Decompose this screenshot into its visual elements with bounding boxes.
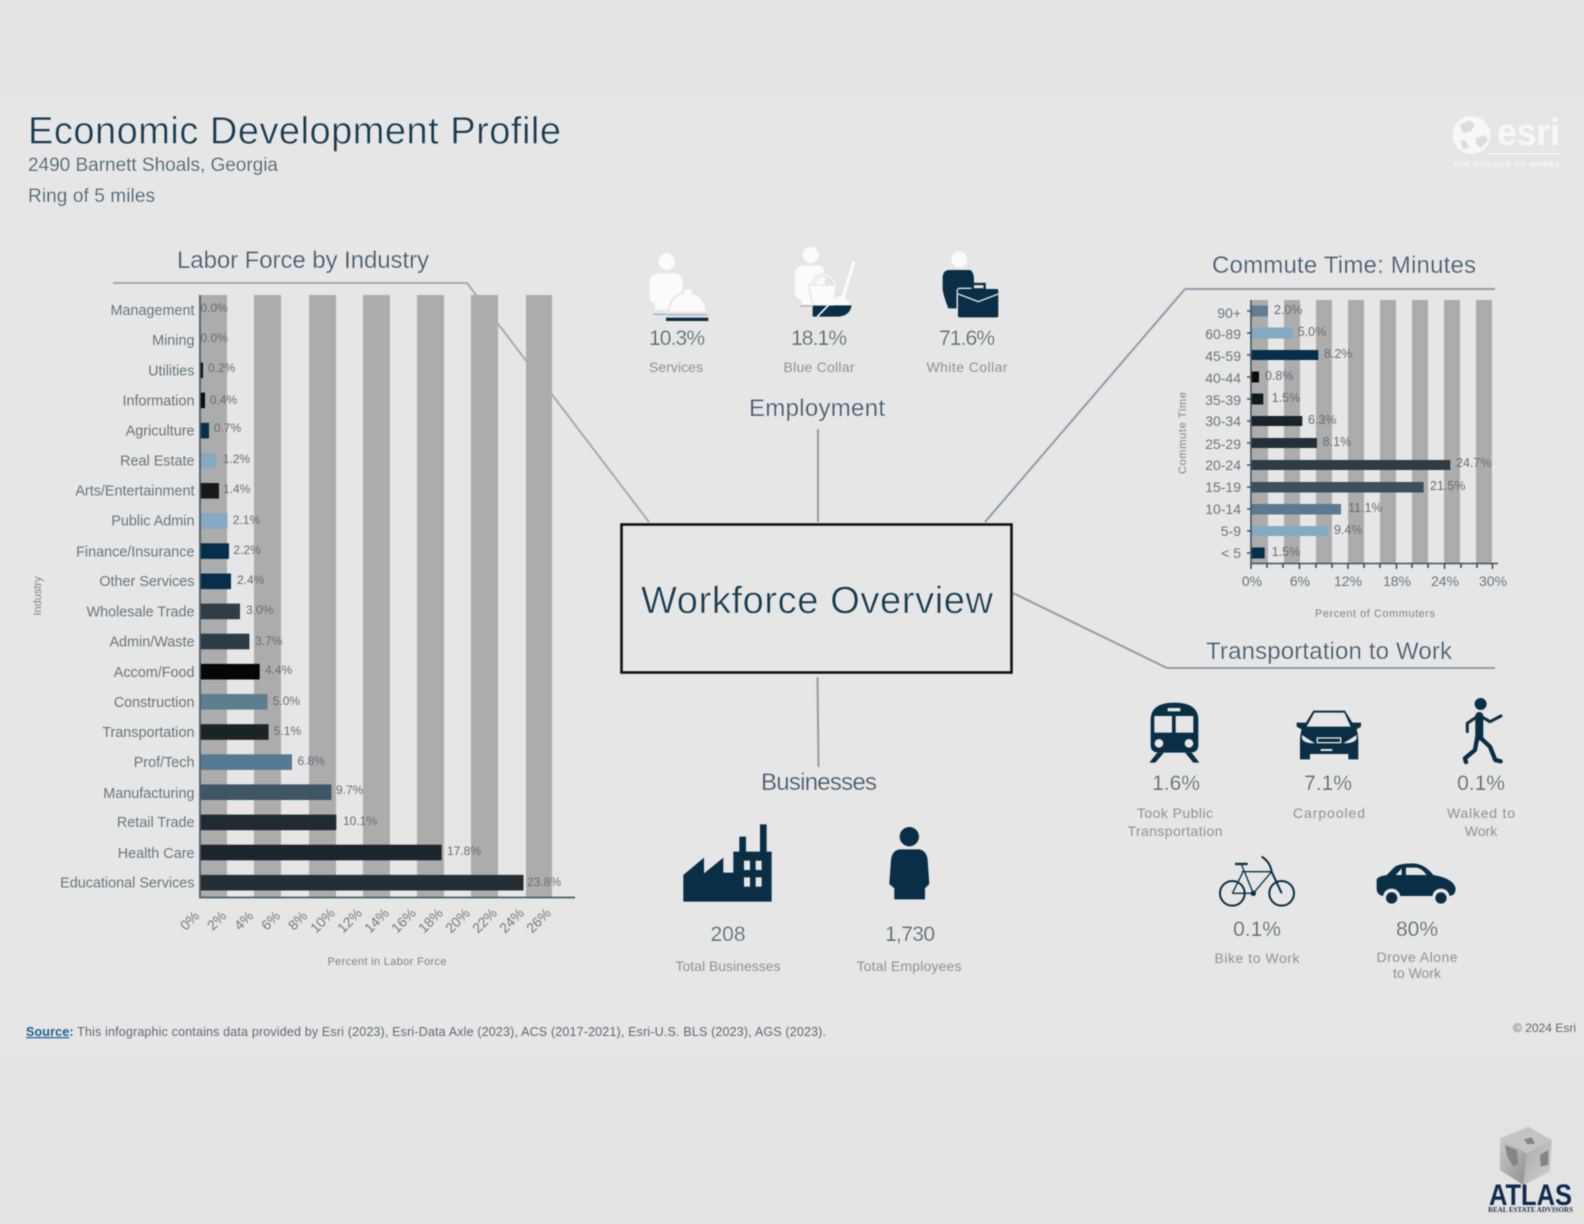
value labels: 10.1% [343, 814, 377, 828]
value labels: 2.2% [233, 543, 261, 557]
value labels: 0.8% [1265, 369, 1294, 383]
value labels [200, 301, 561, 889]
heading: labor force: Labor Force by Industry [177, 247, 429, 274]
category labels: 25-29 [1205, 436, 1241, 452]
x axis ticks: 12% [334, 905, 365, 936]
value labels: 0.4% [210, 393, 237, 407]
x axis ticks: 10% [307, 905, 338, 936]
category labels: Accom/Food [114, 665, 194, 681]
caption: public transportation: Took Public [1137, 805, 1213, 821]
source note: Source: This infographic contains data provided by Esri (2023), Esri-Data Axle (2023), ACS (2017-2021), Esri-U.S. BLS (2023), AGS (2023). [26, 1025, 826, 1039]
value labels: 0.2% [208, 361, 236, 375]
category labels: Management [110, 303, 194, 319]
x axis ticks: 12% [1334, 573, 1362, 589]
caption line two: drove alone: to Work [1393, 965, 1442, 981]
value labels: 1.5% [1272, 391, 1300, 405]
category labels: Admin/Waste [109, 634, 194, 650]
chart background stripes [1252, 300, 1492, 563]
axes [200, 295, 575, 898]
caption: total employees: Total Employees [856, 958, 962, 974]
value labels [1265, 303, 1491, 559]
x axis ticks [177, 905, 554, 936]
category labels: Other Services [99, 574, 194, 590]
icon: esri logo: THE SCIENCE OF WHERE [1453, 160, 1560, 169]
caption: services: Services [649, 359, 703, 375]
value labels: 9.7% [336, 783, 364, 797]
caption line two: walked: Work [1465, 823, 1498, 839]
panel: workforce overview box: Workforce Overview [641, 580, 994, 622]
value labels: 0.0% [200, 331, 228, 345]
x axis ticks: 18% [1383, 573, 1411, 589]
bars: commute [1251, 306, 1450, 558]
x axis ticks: 4% [231, 908, 256, 933]
caption: walked: Walked to [1447, 805, 1515, 821]
value labels: 11.1% [1348, 501, 1383, 515]
category labels: 40-44 [1205, 370, 1241, 386]
connector: labor force line [113, 283, 649, 522]
x axis ticks: 16% [388, 905, 419, 936]
value labels: 2.1% [233, 513, 260, 527]
category labels: Health Care [118, 846, 194, 862]
caption: blue collar: Blue Collar [784, 359, 855, 375]
caption: bike: Bike to Work [1214, 950, 1300, 966]
axes and ticks [1247, 300, 1498, 569]
category labels: Prof/Tech [134, 755, 194, 771]
caption: total businesses: Total Businesses [676, 958, 780, 974]
icon: esri logo [1452, 112, 1560, 169]
panel: transportation to work [1128, 638, 1515, 981]
x axis ticks: 0% [1242, 573, 1262, 589]
value labels: 2.0% [1274, 303, 1302, 317]
x axis ticks: 8% [285, 908, 310, 933]
category labels: Information [122, 394, 194, 410]
category labels: 10-14 [1205, 501, 1241, 517]
x axis ticks: 0% [177, 908, 202, 933]
x axis title: Percent of Commuters [1315, 608, 1436, 620]
x axis ticks: 30% [1479, 573, 1507, 589]
value labels: 17.8% [447, 844, 481, 858]
text: total employees value: 1,730 [885, 923, 935, 946]
heading: transportation: Transportation to Work [1206, 638, 1453, 665]
category labels: 60-89 [1205, 326, 1241, 342]
text: carpooled: 7.1% [1304, 772, 1352, 795]
x axis ticks: 26% [523, 905, 554, 936]
category labels: 5-9 [1221, 523, 1241, 539]
text: white collar: 71.6% [939, 327, 995, 350]
x axis ticks: 24% [496, 905, 527, 936]
category labels: Transportation [102, 725, 194, 741]
icon: train [1149, 703, 1199, 763]
icon: employee person [889, 827, 929, 899]
icon: services [649, 253, 708, 321]
copyright: © 2024 Esri [1513, 1021, 1576, 1035]
category labels: Real Estate [120, 454, 194, 470]
subtitle: address: 2490 Barnett Shoals, Georgia [28, 155, 278, 176]
value labels: 1.2% [223, 452, 250, 466]
category labels: Manufacturing [103, 786, 194, 802]
value labels: 8.2% [1324, 347, 1352, 361]
value labels: 5.1% [274, 724, 301, 738]
x axis ticks: 22% [469, 905, 500, 936]
caption: drove alone: Drove Alone [1376, 949, 1458, 965]
y axis title: Industry [32, 576, 44, 616]
caption line two: public transportation: Transportation [1128, 823, 1222, 839]
value labels: 3.7% [255, 634, 283, 648]
chart background stripes [200, 295, 552, 897]
connector: commute line [985, 289, 1495, 522]
category labels: Arts/Entertainment [75, 484, 194, 500]
icon: bicycle [1220, 857, 1294, 906]
x axis ticks: 14% [361, 905, 392, 936]
x axis title: Percent in Labor Force [328, 956, 446, 968]
text: services: 10.3% [649, 327, 705, 350]
value labels: 5.0% [273, 694, 300, 708]
icon: blue collar [795, 247, 854, 317]
caption: white collar: White Collar [926, 359, 1008, 375]
x axis ticks: 24% [1431, 573, 1459, 589]
icon: atlas logo: ATLAS [1489, 1179, 1572, 1212]
x axis ticks: 6% [258, 908, 283, 933]
value labels: 6.8% [298, 754, 325, 768]
panel: commute time [1177, 252, 1507, 620]
text: blue collar: 18.1% [791, 327, 847, 350]
category labels: Educational Services [60, 876, 194, 892]
category labels: 45-59 [1205, 348, 1241, 364]
bars: industries [200, 362, 524, 890]
value labels: 1.5% [1272, 545, 1300, 559]
icon: car front [1297, 711, 1361, 759]
category labels: 15-19 [1205, 479, 1241, 495]
text: public transportation: 1.6% [1152, 772, 1200, 795]
category labels: Retail Trade [117, 815, 194, 831]
icon: atlas logo: REAL ESTATE ADVISORS [1488, 1206, 1573, 1214]
text: walked: 0.1% [1457, 772, 1505, 795]
value labels: 0.0% [200, 301, 228, 315]
value labels: 9.4% [1334, 523, 1362, 537]
chart: labor force by industry [32, 247, 575, 968]
panel: workforce overview box [622, 524, 1012, 672]
heading: employment: Employment [749, 395, 885, 422]
icon: white collar [943, 251, 999, 318]
category labels: Mining [152, 333, 194, 349]
value labels: 21.5% [1430, 479, 1465, 493]
category labels: 20-24 [1205, 457, 1241, 473]
icon: walker [1465, 698, 1501, 762]
value labels: 6.3% [1308, 413, 1336, 427]
panel: employment [649, 247, 1008, 422]
value labels: 24.7% [1456, 456, 1491, 470]
text: total businesses value: 208 [710, 923, 746, 946]
title: Economic Development Profile [28, 110, 561, 152]
icon: atlas logo [1488, 1127, 1573, 1214]
x axis ticks: 20% [442, 905, 473, 936]
value labels: 1.4% [223, 482, 251, 496]
category labels: Wholesale Trade [86, 604, 194, 620]
heading: businesses: Businesses [761, 769, 877, 796]
value labels: 0.7% [214, 421, 241, 435]
connector: employment line [817, 429, 819, 522]
icon: esri logo: esri [1497, 112, 1560, 154]
icon: car side [1377, 863, 1456, 906]
value labels: 8.1% [1323, 435, 1351, 449]
value labels: 2.4% [237, 573, 265, 587]
connector: transportation line [1013, 593, 1495, 668]
text: drove alone: 80% [1396, 918, 1438, 941]
category labels: Agriculture [126, 424, 194, 440]
value labels: 3.0% [246, 603, 274, 617]
x axis ticks [1242, 573, 1507, 589]
category labels: Utilities [148, 364, 194, 380]
heading: commute: Commute Time: Minutes [1212, 252, 1476, 279]
value labels: 4.4% [265, 663, 293, 677]
y axis title: Commute Time [1177, 392, 1189, 474]
category labels [1205, 305, 1241, 561]
category labels: < 5 [1221, 545, 1241, 561]
icon: factory [683, 824, 772, 902]
text: bike: 0.1% [1233, 918, 1281, 941]
value labels: 23.8% [527, 875, 561, 889]
connector: businesses line [818, 677, 819, 767]
value labels: 5.0% [1298, 325, 1326, 339]
category labels: Construction [114, 695, 194, 711]
category labels [60, 303, 194, 892]
subtitle: ring: Ring of 5 miles [28, 186, 155, 207]
category labels: 90+ [1217, 305, 1241, 321]
category labels: 35-39 [1205, 392, 1241, 408]
panel: businesses [676, 769, 962, 974]
category labels: 30-34 [1205, 413, 1241, 429]
caption: carpooled: Carpooled [1293, 805, 1365, 821]
category labels: Public Admin [111, 514, 194, 530]
x axis ticks: 2% [204, 908, 229, 933]
header [28, 110, 561, 207]
x axis ticks: 6% [1290, 573, 1310, 589]
x axis ticks: 18% [415, 905, 446, 936]
category labels: Finance/Insurance [76, 544, 194, 560]
